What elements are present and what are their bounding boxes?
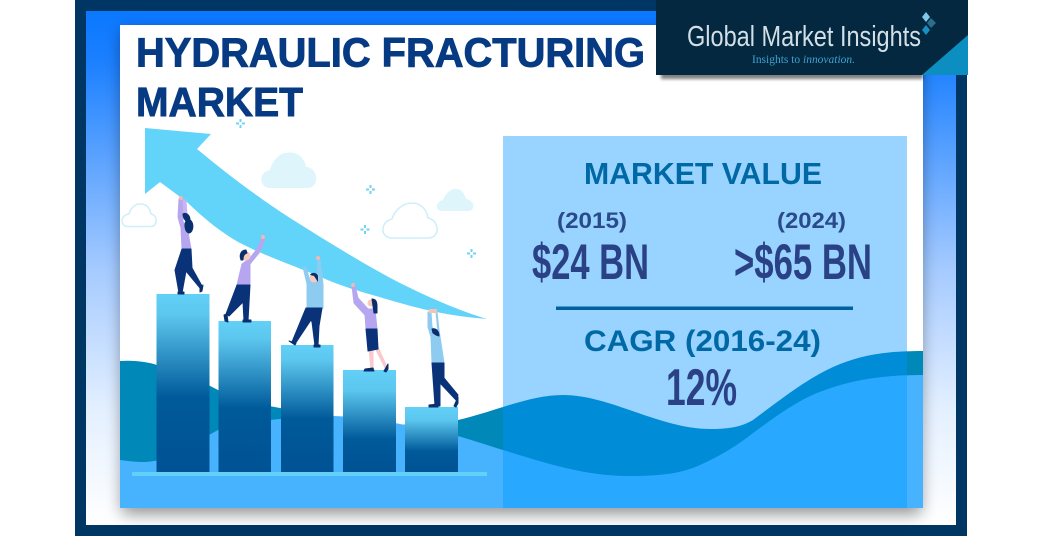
divider (556, 306, 853, 310)
title: MARKET (136, 79, 303, 125)
figures climbing bars (175, 196, 458, 407)
panel: market value (503, 136, 907, 508)
person 2 (224, 235, 265, 322)
value 2024: >$65 BN (734, 234, 872, 290)
bar chart (156, 294, 458, 472)
person 5 (428, 309, 458, 407)
logo diamonds (922, 12, 936, 35)
title: HYDRAULIC FRACTURING (136, 30, 645, 76)
sparkles (236, 119, 476, 258)
growth arrow (145, 128, 487, 319)
cloud: filled large (261, 152, 316, 188)
value 2015: $24 BN (532, 234, 649, 290)
logo wordmark: Global Market Insights (687, 21, 921, 53)
title (136, 30, 645, 125)
wave overlay in panel (503, 351, 907, 508)
logo triangle (922, 35, 968, 75)
heading: market value: MARKET VALUE (584, 156, 822, 191)
value 2024 (734, 208, 872, 290)
person 4 (351, 283, 388, 372)
waves behind bars (120, 351, 923, 508)
cloud: outline right (383, 203, 437, 238)
value 2015 (532, 208, 649, 290)
cloud: outline left (122, 204, 156, 226)
person 3 (289, 256, 323, 347)
cagr value: 12% (666, 359, 737, 417)
logo block (656, 0, 968, 79)
person 1 (175, 196, 203, 294)
cagr label: CAGR (2016-24) (584, 325, 821, 358)
value 2015: (2015) (557, 208, 627, 233)
cloud: filled small (437, 189, 473, 211)
panel background (503, 136, 907, 508)
value 2024: (2024) (777, 208, 846, 233)
logo tagline: Insights to innovation. (752, 54, 855, 66)
decorative clouds and sparkles (122, 119, 476, 258)
base line (132, 472, 487, 476)
white card with shadow (120, 25, 923, 514)
